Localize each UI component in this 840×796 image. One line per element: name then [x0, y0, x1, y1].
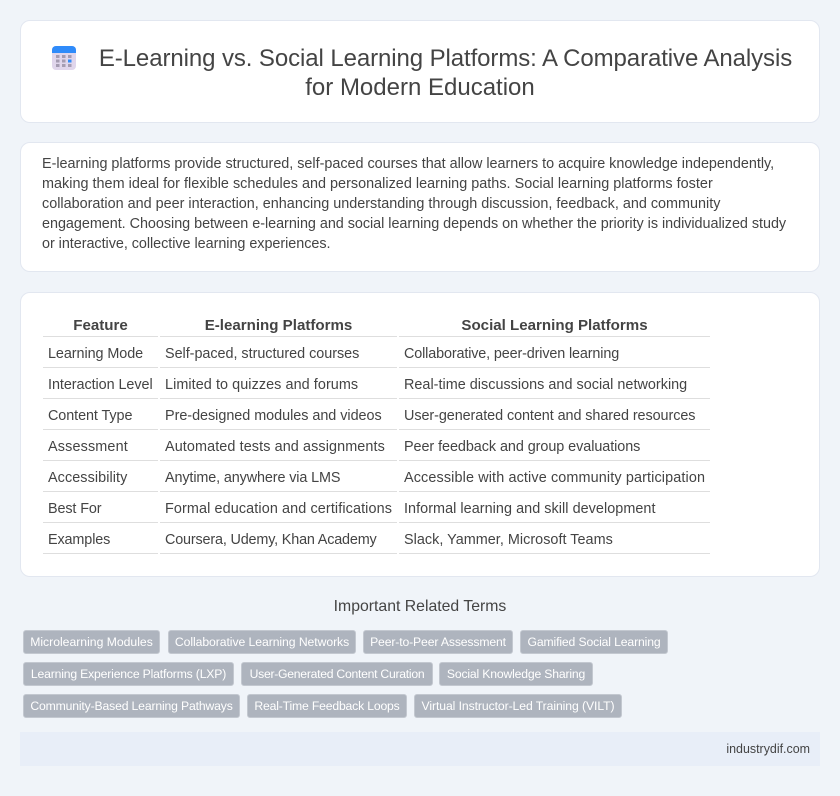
comparison table: Best For [48, 501, 101, 517]
related term tags: Real-Time Feedback Loops [254, 699, 400, 713]
table header: E-learning Platforms: E-learning Platforms [205, 317, 352, 334]
comparison table: Coursera, Udemy, Khan Academy [165, 532, 377, 548]
intro paragraph: collaboration and peer interaction, enhancing understanding through discussion, feedback, and community [42, 196, 720, 212]
panel: intro text [20, 142, 820, 272]
comparison table: Formal education and certifications [165, 501, 392, 517]
intro paragraph [42, 156, 786, 252]
intro paragraph: engagement. Choosing between e-learning and social learning depends on whether the priority is individualized study [42, 216, 786, 232]
comparison table: Anytime, anywhere via LMS [165, 470, 340, 486]
comparison table: Self-paced, structured courses [165, 346, 359, 362]
footer bar [20, 732, 820, 766]
related term tags: Learning Experience Platforms (LXP) [31, 667, 226, 681]
related term tags: Peer-to-Peer Assessment [370, 635, 506, 649]
intro paragraph: making them ideal for flexible schedules and personalized learning paths. Social learning platforms foster [42, 176, 713, 192]
comparison table: Limited to quizzes and forums [165, 377, 358, 393]
comparison table: Examples [48, 532, 110, 548]
intro paragraph: or interactive, collective learning experiences. [42, 236, 330, 252]
comparison table: Learning Mode [48, 346, 143, 362]
comparison table: Accessibility [48, 470, 127, 486]
related term tags: Microlearning Modules [30, 635, 153, 649]
related term tags: Social Knowledge Sharing [447, 667, 585, 681]
table header: Social Learning Platforms: Social Learning Platforms [461, 317, 648, 334]
title [99, 45, 792, 101]
panel: comparison table [20, 292, 820, 577]
comparison table: Pre-designed modules and videos [165, 408, 382, 424]
comparison table: Peer feedback and group evaluations [404, 439, 640, 455]
comparison table: Collaborative, peer-driven learning [404, 346, 619, 362]
comparison table: Real-time discussions and social networking [404, 377, 687, 393]
related term tags [23, 630, 668, 718]
comparison table: Informal learning and skill development [404, 501, 656, 517]
comparison table: User-generated content and shared resources [404, 408, 695, 424]
related term tags: Gamified Social Learning [527, 635, 661, 649]
related term tags: User-Generated Content Curation [250, 667, 424, 681]
comparison table: Content Type [48, 408, 132, 424]
comparison table: Slack, Yammer, Microsoft Teams [404, 532, 613, 548]
comparison table: Automated tests and assignments [165, 439, 385, 455]
related term tags: Community-Based Learning Pathways [30, 699, 233, 713]
related term tags: Virtual Instructor-Led Training (VILT) [422, 699, 614, 713]
table header: Feature: Feature [73, 317, 128, 334]
footer source text: industrydif.com [726, 742, 810, 756]
comparison table: Assessment [48, 439, 128, 455]
intro paragraph: E-learning platforms provide structured, self-paced courses that allow learners to acquire knowledge independently, [42, 156, 774, 172]
heading: Important Related Terms: Important Related Terms [334, 598, 506, 615]
comparison table: Accessible with active community participation [404, 470, 705, 486]
title: for Modern Education [305, 74, 535, 101]
icon: calendar [52, 46, 76, 70]
comparison table [43, 317, 710, 554]
panel: title header [20, 20, 820, 123]
related term tags: Collaborative Learning Networks [175, 635, 349, 649]
comparison table: Interaction Level [48, 377, 153, 393]
title: E-Learning vs. Social Learning Platforms: A Comparative Analysis [99, 45, 792, 72]
